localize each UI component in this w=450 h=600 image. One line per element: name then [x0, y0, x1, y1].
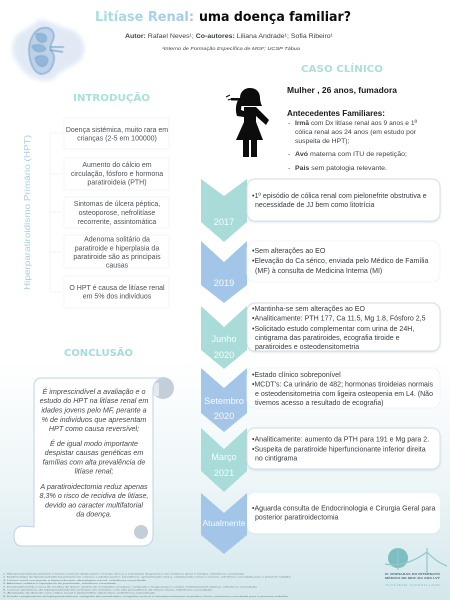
card: setembro 2020	[247, 368, 440, 408]
card: março 2021: •Suspeita de paratiroide hiperfuncionante inferior direita	[252, 446, 426, 454]
arrow: setembro 2020: 2020	[214, 411, 234, 421]
card: junho 2020	[247, 303, 440, 351]
conclusion text	[39, 387, 149, 518]
family history: -	[288, 120, 290, 127]
family history: -	[288, 151, 290, 158]
card: 2019: •Elevação do Ca sérico, enviada pelo Médico de Família	[252, 258, 428, 265]
box: sintomas: Sintomas de úlcera péptica,	[74, 201, 160, 208]
box: doença sistémica	[64, 118, 169, 149]
heading: conclusão: CONCLUSÃO	[64, 346, 133, 359]
panel: conclusão scroll	[14, 377, 174, 546]
card: setembro 2020: •Estado clínico sobreponível	[252, 372, 341, 379]
conclusion text: estudo do HPT na litíase renal em	[40, 396, 148, 405]
family history	[287, 108, 417, 172]
references: 3. Litíase renal recorrente e hipercalcemia: abordagem inicial, referência consultada	[3, 579, 147, 582]
timeline: março 2021	[201, 428, 440, 492]
arrow: junho 2020	[201, 306, 247, 369]
references: 4. Adenoma solitário e hiperplasia da paratiroide, referência consultada	[3, 582, 117, 585]
logo: jornadas do internato: SAÚDE FAMILIAR	[385, 582, 440, 587]
arrow: 2019: 2019	[214, 278, 234, 288]
conclusion text: % de indivíduos que apresentam	[42, 415, 146, 424]
card: junho 2020: •Solicitado estudo complementar com urina de 24H,	[252, 326, 414, 333]
arrow: 2017: 2017	[214, 217, 234, 227]
family history: cólica renal aos 24 anos (em estudo por	[295, 129, 417, 136]
arrow: 2019	[201, 241, 247, 303]
references	[3, 572, 292, 598]
family history: -	[288, 165, 290, 172]
arrow: atualmente	[201, 493, 247, 554]
conclusion text: litíase renal;	[75, 466, 113, 476]
references: 1. Hiperparatiroidismo primário e litíase renal em idade jovem: revisão clínica e orientação diagnóstica em medicina geral e familiar, referência consultada	[3, 572, 245, 576]
arrow: junho 2020: Junho	[211, 334, 237, 344]
box: aumento do cálcio: Aumento do cálcio em	[82, 162, 152, 169]
box: adenoma: paratiroide e hiperplasia da	[75, 246, 159, 252]
timeline: junho 2020	[201, 303, 440, 369]
arrow: junho 2020: 2020	[214, 350, 234, 360]
arrow: setembro 2020: Setembro	[204, 396, 244, 406]
box: aumento do cálcio	[64, 158, 169, 190]
card: atualmente: •Aguarda consulta de Endocrinologia e Cirurgia Geral para	[252, 506, 436, 512]
family history: Pais sem patologia relevante.	[295, 165, 387, 172]
card: atualmente: posterior paratiroidectomia	[255, 514, 339, 522]
card: março 2021: •Analiticamente: aumento da PTH para 191 e Mg para 2.	[252, 436, 429, 444]
logo: jornadas do internato	[385, 548, 447, 587]
box: adenoma: Adenoma solitário da	[84, 236, 150, 244]
box: doença sistémica: Doença sistémica, muito rara em	[66, 127, 168, 134]
family history: Antecedentes Familiares:	[287, 108, 385, 118]
icon: kidney illustration	[12, 20, 84, 81]
box: doença sistémica: crianças (2-5 em 100000)	[77, 136, 157, 142]
card: junho 2020: cintigrama das paratiroides, ecografia tiroide e	[255, 335, 400, 342]
arrow: setembro 2020	[201, 368, 247, 432]
box: causa de litíase: em 5% dos indivíduos	[83, 294, 152, 300]
references: 5. Paratiroidectomia e risco de recidiva de litíase: análise de resultados cirúrgicos, evolução a longo prazo e caráter multifatorial da doença, referência consultada	[3, 585, 258, 588]
authors: Autor: Rafael Neves¹; Co-autores: Liliana Andrade¹; Sofia Ribeiro¹	[125, 33, 334, 40]
conclusion text: da doença.	[76, 510, 112, 518]
affiliation: ¹Interno de Formação Específica de MGF; UCSP Tábua	[162, 46, 301, 51]
references: 7. Avaliação do doente com cólica renal e pielonefrite obstrutiva, referência consultada	[3, 592, 156, 595]
card: 2017: •1º episódio de cólica renal com pielonefrite obstrutiva e	[252, 193, 427, 200]
conclusion text: 8,3% o risco de recidiva de litíase,	[39, 491, 149, 500]
logo: jornadas do internato: IV JORNADAS DO INTERNATO	[385, 572, 441, 576]
panel: introdução	[23, 118, 169, 308]
box: adenoma: causas	[106, 262, 129, 270]
card: junho 2020: paratiroides e osteodensitometria	[255, 344, 359, 351]
arrow: atualmente: Atualmente	[202, 519, 246, 528]
card: setembro 2020: tivemos acesso a resultado de ecografia)	[255, 400, 383, 407]
box: sintomas: osteoporose, nefrolitíase	[79, 210, 155, 217]
box: causa de litíase	[64, 276, 169, 308]
scroll shape	[14, 377, 174, 546]
box: aumento do cálcio: paratiroideia (PTH)	[87, 180, 147, 186]
family history: Irmã com Dx litíase renal aos 9 anos e 1ª	[295, 120, 417, 127]
conclusion text: famílias com alta prevalência de	[43, 458, 145, 466]
box: sintomas	[64, 197, 169, 228]
heading: introdução: INTRODUÇÃO	[73, 91, 150, 104]
family history: suspeita de HPT);	[295, 138, 350, 145]
timeline: 2019	[201, 241, 440, 303]
box: aumento do cálcio: circulação, fósforo e hormona	[71, 171, 163, 178]
card: março 2021: no cintigrama	[255, 456, 297, 462]
card: 2019: •Sem alterações ao EO	[252, 248, 326, 255]
card: março 2021	[247, 428, 440, 469]
box: adenoma	[64, 235, 169, 270]
heading: caso clínico: CASO CLÍNICO	[301, 62, 383, 75]
conclusion text: HPT como causa reversível;	[49, 424, 139, 433]
card: junho 2020: •Analiticamente: PTH 177, Ca 11.5, Mg 1.8, Fósforo 2,5	[252, 316, 426, 322]
card: atualmente	[247, 493, 440, 533]
card: 2017	[247, 179, 440, 221]
logo: jornadas do internato: MÉDICO DE MGF DA ARS LVT	[385, 575, 440, 580]
title: Litíase Renal:	[95, 9, 194, 25]
conclusion text: despistar causas genéticas em	[45, 448, 143, 457]
timeline: 2017	[201, 179, 440, 242]
card: 2017: necessidade de JJ bem como litotrícia	[255, 202, 375, 209]
arrow: março 2021	[201, 428, 247, 492]
timeline: setembro 2020	[201, 368, 440, 432]
card: setembro 2020: e osteodensitometria com ligeira osteopenia em L4. (Não	[255, 391, 433, 398]
icon: woman smoking	[226, 88, 269, 157]
title	[95, 9, 351, 25]
conclusion text: devido ao caracter multifatorial	[45, 500, 143, 510]
references: 6. Causas genéticas de hiperparatiroidismo primário em famílias com alta prevalência de litíase renal, referência consultada	[3, 588, 213, 592]
conclusion text: É imprescindível a avaliação e o	[42, 387, 146, 396]
box: adenoma: paratiroide são as principais	[73, 254, 161, 261]
conclusion text: idades jovens pelo MF, perante a	[41, 406, 147, 414]
box: causa de litíase: O HPT é causa de litíase renal	[69, 285, 165, 292]
arrow: março 2021: Março	[211, 452, 237, 462]
title: uma doença familiar?	[199, 9, 351, 25]
patient summary: Mulher , 26 anos, fumadora	[287, 85, 397, 95]
card: 2019: (MF) à consulta de Medicina Interna (MI)	[255, 268, 382, 275]
vertical label: hiperparatiroidismo: Hiperparatiroidismo Primário (HPT)	[23, 135, 32, 290]
card: 2019	[247, 241, 440, 282]
arrow: 2017	[201, 179, 247, 242]
references: 2. Epidemiologia do hiperparatiroidismo primário em crianças e adultos jovens: prevalência, apresentação clínica, complicações renais e ósseas, referência consultada para o presente trabalho	[3, 576, 292, 579]
references: 8. Estudo complementar do hiperparatiroidismo: cintigrafia das paratiroides, ecografia cervical e osteodensitometria na prática clínica, referência consultada para o presente trabalho	[3, 595, 289, 598]
card: junho 2020: •Mantinha-se sem alterações ao EO	[252, 306, 365, 313]
conclusion text: A paratiroidectomia reduz apenas	[39, 482, 148, 491]
conclusion text: É de igual modo importante	[50, 439, 138, 448]
arrow: março 2021: 2021	[214, 468, 234, 478]
box: sintomas: recorrente, assintomática	[78, 219, 156, 226]
timeline: atualmente	[201, 493, 440, 554]
card: setembro 2020: •MCDT's: Ca urinário de 482; hormonas tiroideias normais	[252, 382, 433, 388]
family history: Avó materna com ITU de repetição;	[295, 151, 407, 158]
